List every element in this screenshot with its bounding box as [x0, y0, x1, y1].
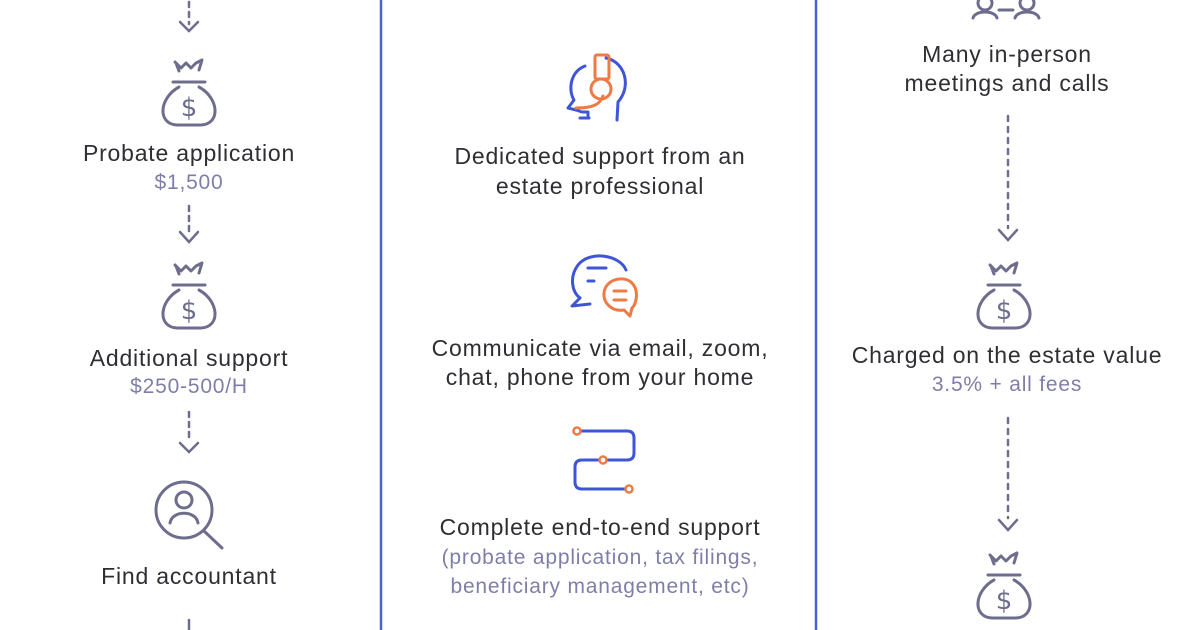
icon: path: [574, 428, 634, 492]
text: probate application: $1,500: [154, 171, 224, 194]
text: communicate: Communicate via email, zoom,: [432, 335, 768, 361]
icon: headset: [568, 55, 625, 120]
icon: chat: [572, 256, 636, 316]
text: charged on estate: Charged on the estate value: [852, 342, 1162, 368]
text: many meetings: [905, 41, 1109, 96]
arrow: left bottom: [188, 620, 190, 630]
arrow: left 2: [180, 206, 198, 242]
panel: middle border: [381, 0, 816, 630]
text: communicate: chat, phone from your home: [446, 364, 754, 390]
text: end-to-end support: [440, 514, 760, 598]
arrow: right 2: [999, 418, 1017, 530]
text: many meetings: meetings and calls: [905, 70, 1109, 96]
text: additional support: Additional support: [90, 345, 288, 371]
icon: find accountant: [156, 482, 222, 548]
text: probate application: [83, 140, 295, 194]
text: communicate: [432, 335, 768, 390]
icon: money bag bottom: [978, 553, 1030, 618]
text: end-to-end support: (probate application, tax filings,: [442, 546, 758, 569]
text: probate application: Probate application: [83, 140, 295, 166]
icon: money bag estate: [978, 263, 1030, 328]
text: dedicated support: [454, 143, 746, 199]
text: charged on estate: [852, 342, 1162, 396]
arrow: left top: [180, 2, 198, 31]
text: find accountant: Find accountant: [101, 563, 277, 589]
arrow: left 3: [180, 412, 198, 452]
text: dedicated support: Dedicated support from an: [454, 143, 746, 169]
text: dedicated support: estate professional: [496, 173, 704, 199]
text: end-to-end support: Complete end-to-end support: [440, 514, 760, 540]
text: additional support: $250-500/H: [130, 375, 248, 398]
text: additional support: [90, 345, 288, 398]
icon: money bag support: [163, 263, 215, 328]
arrow: right 1: [999, 116, 1017, 240]
text: end-to-end support: beneficiary management, etc): [450, 575, 750, 598]
icon: people: [973, 0, 1039, 18]
text: many meetings: Many in-person: [922, 41, 1092, 67]
icon: money bag probate: [163, 60, 215, 125]
text: charged on estate: 3.5% + all fees: [932, 373, 1082, 396]
